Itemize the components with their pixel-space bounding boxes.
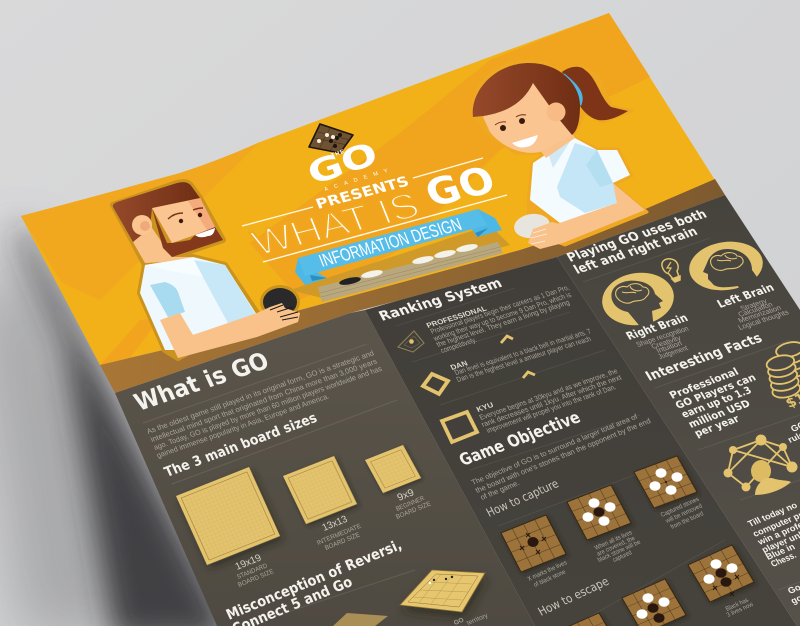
man neck	[133, 225, 193, 263]
panel: ranking and objective column	[365, 257, 797, 626]
woman eyes and mouth	[495, 115, 538, 148]
text: professional: competitively.	[439, 335, 478, 355]
ribbon: information design: INFORMATION DESIGN	[316, 214, 465, 271]
woman hand	[528, 222, 566, 249]
text: intro paragraph: intellectual mind sport that originated from China more than 3,000 years	[149, 357, 379, 444]
label: 9x9: BOARD SIZE	[395, 500, 433, 521]
caption: capture step 1: of black stone	[533, 569, 567, 589]
text: intro paragraph: As the oldest game still played in its original form, GO is a strategic and	[145, 348, 375, 436]
text: the: THE	[331, 149, 345, 159]
caption: capture step 2: When all its lives	[594, 529, 634, 552]
caption: capture step 2: captured	[612, 549, 634, 564]
panel: poster header	[21, 13, 715, 365]
text: fact 1: earn up to 1.3	[679, 385, 754, 421]
label: left brain	[714, 281, 791, 332]
text: kyu: Everyone begins at 30kyu and as we improve, the	[478, 367, 619, 422]
text: fact 1: million USD	[686, 398, 753, 431]
label: 19x19	[234, 552, 276, 589]
stones	[339, 243, 478, 286]
text: objective: The objective of GO is to surround a larger total area of	[470, 412, 640, 487]
board: 9x9	[365, 445, 421, 493]
board: 19x19	[176, 467, 280, 565]
text: academy: ACADEMY	[324, 168, 389, 193]
text: dan: Dan is the highest level a amateur player can reach	[455, 334, 593, 384]
text: professional	[425, 283, 573, 355]
woman ear	[546, 102, 566, 122]
board: capture step 3	[634, 456, 697, 508]
heading: what is go: What is GO	[130, 347, 273, 416]
label: 13x13	[316, 514, 363, 552]
icon: light bulb	[662, 259, 680, 282]
icon: board logo	[309, 124, 353, 153]
heading: game objective: Game Objective	[456, 408, 584, 470]
label: 9x9: BEGINNER	[395, 495, 426, 513]
heading: playing go: left and right brain	[571, 225, 701, 277]
caption: capture step 3: from the board	[670, 510, 705, 531]
text: intro paragraph: ago. Today, GO is played by more than 60 million players worldwide and has	[152, 364, 384, 452]
icon: right brain	[599, 268, 677, 330]
icon: kyu	[442, 412, 477, 442]
title: what is go: WHAT IS	[246, 184, 425, 263]
label: 13x13: 13x13	[321, 514, 350, 534]
title: what is go: GO	[419, 158, 501, 215]
text: fact 1: Professional	[667, 366, 741, 402]
man face	[152, 198, 215, 243]
white stone in hand	[513, 212, 551, 240]
label: right brain: Shape recognition	[634, 324, 690, 349]
icon: dan	[423, 374, 448, 394]
man hair	[113, 182, 200, 242]
board: capture step 2	[567, 485, 631, 540]
text: dan: Dan level is equivalent to a black belt in martial arts. 7	[453, 327, 593, 377]
label: left brain: Memorization	[736, 303, 783, 325]
woman hair	[473, 63, 580, 135]
text: presents: PRESENTS	[314, 174, 411, 213]
label: 19x19: BOARD SIZE	[237, 568, 276, 589]
man halo	[113, 182, 257, 358]
poster shadow	[0, 222, 240, 626]
illustration: go board on desk	[290, 225, 510, 302]
text: fact 1	[667, 366, 758, 440]
panel: what is go column	[115, 310, 535, 626]
caption: capture step 2: black stone will be	[597, 539, 642, 564]
woman face	[483, 83, 572, 153]
label: right brain: Right Brain	[623, 311, 690, 343]
label: go territory	[453, 612, 490, 626]
label: left brain: Strategy	[738, 297, 769, 313]
board: escape step 1	[556, 613, 620, 626]
board: 13x13	[283, 456, 357, 524]
woman shirt	[530, 137, 630, 223]
hair band	[558, 72, 583, 106]
caption: capture step 3	[660, 496, 705, 531]
label: 19x19: 19x19	[234, 552, 264, 573]
heading: board sizes: The 3 main board sizes	[162, 410, 320, 481]
caption: capture step 1	[527, 559, 569, 589]
icon: network and person	[724, 434, 798, 495]
label: 9x9	[395, 487, 433, 521]
logo: go academy	[302, 124, 411, 213]
text: objective: the board with one's stones than the opponent by the end	[474, 416, 652, 495]
ponytail	[562, 67, 628, 120]
man eyes and mouth	[168, 208, 215, 237]
label: right brain	[623, 311, 690, 361]
text: professional: working their way up to become 9 Dan Pro, which is	[431, 290, 573, 343]
text: fact 3: Blue in	[764, 542, 797, 562]
board: escape step 2	[622, 579, 686, 626]
label: 13x13: INTERMEDIATE	[316, 523, 363, 547]
black stone in hand	[260, 285, 300, 319]
text: dan: DAN	[449, 359, 469, 372]
label: 9x9: 9x9	[396, 487, 416, 504]
label: 13x13: BOARD SIZE	[324, 531, 362, 552]
man ear	[132, 215, 152, 235]
icon: left brain	[686, 237, 766, 295]
label: right brain: Creativity	[649, 334, 683, 351]
icon: professional	[398, 331, 424, 352]
desk band	[100, 179, 725, 393]
woman arm	[533, 183, 645, 243]
caption: capture step 2	[594, 529, 642, 564]
label: left brain: Logical thoughts	[736, 308, 791, 332]
title: what is go	[242, 158, 507, 263]
label: right brain: Intuition	[654, 339, 684, 355]
icon: chevron up	[501, 336, 513, 343]
label: right brain: Judgement	[656, 343, 690, 361]
icon: coins	[763, 340, 800, 400]
board: capture step 1	[501, 515, 566, 572]
text: fact 3: Till today no	[746, 500, 799, 529]
caption: capture step 3: will be removed	[664, 503, 704, 525]
caption: capture step 1: X marks the lives	[527, 559, 569, 583]
board: second perspective board	[333, 613, 388, 626]
ribbon: information design	[295, 209, 502, 285]
text: fact 4	[786, 582, 800, 606]
caption: capture step 2: are covered, the	[596, 535, 637, 558]
text: intro paragraph: gained immense popularity in Asia, Europe and America.	[155, 392, 331, 460]
man shirt	[140, 257, 257, 350]
text: kyu: improvement will propel you into the rank of Dan.	[485, 382, 618, 435]
caption: escape step 3: 3 lives now	[726, 601, 755, 619]
heading: ranking system: Ranking System	[376, 276, 505, 325]
label: 19x19: STANDARD	[236, 562, 269, 581]
text: fact 2	[786, 413, 800, 445]
icon: chevron up	[523, 372, 535, 378]
woman halo	[472, 61, 647, 245]
text: kyu: rank decreases until 1kyu. After which the next	[480, 373, 624, 429]
woman neck	[540, 133, 575, 158]
label: left brain: Left Brain	[714, 281, 777, 311]
text: professional: Professional players begin their careers as 1 Dan Pro,	[429, 283, 571, 336]
caption: escape step 3: Black has	[725, 597, 751, 613]
text: professional: PROFESSIONAL	[425, 304, 489, 330]
heading: how to capture: How to capture	[484, 477, 561, 520]
board: escape step 3	[688, 545, 754, 602]
heading: playing go: Playing GO uses both	[564, 207, 710, 265]
board: perspective go board	[400, 570, 485, 612]
man hand	[257, 303, 300, 331]
illustration: woman	[472, 61, 647, 249]
heading: how to escape: How to escape	[535, 574, 611, 619]
text: fact 1: GO Players can	[673, 372, 758, 412]
man beard	[152, 208, 223, 257]
text: fact 3	[746, 499, 800, 569]
label: left brain: Calculation	[736, 300, 774, 319]
man arm	[160, 305, 300, 358]
text: objective: of the game.	[479, 478, 521, 502]
illustration: man	[113, 182, 300, 358]
heading: interesting facts: Interesting Facts	[643, 331, 765, 384]
text: fact 1: per year	[692, 413, 742, 440]
text: kyu: KYU	[475, 400, 495, 414]
panel: brain and facts column	[557, 195, 800, 626]
text: professional: the highest level. They earn a living by playing	[435, 298, 571, 349]
man sleeve patch	[150, 282, 185, 317]
caption: capture step 3: Captured stones	[660, 496, 701, 519]
text: go: GO	[302, 134, 383, 192]
heading: misconception: Misconception of Reversi,	[224, 537, 405, 624]
